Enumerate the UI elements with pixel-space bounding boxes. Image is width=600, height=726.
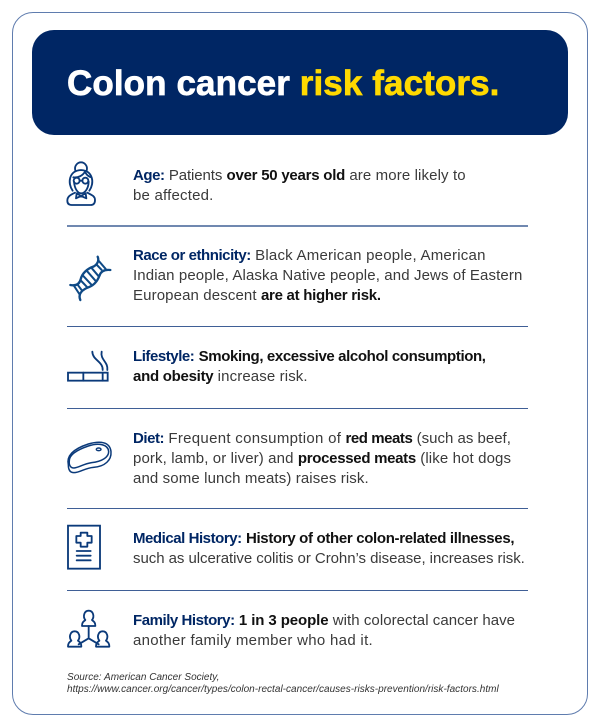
text: family history: another family member who had it. [133,632,373,649]
text: lifestyle: Lifestyle: Smoking, excessive alcohol consumption, [133,348,486,365]
title: Colon cancer risk factors. [67,64,499,103]
text: race or ethnicity [133,247,522,304]
icon: medical record [67,524,101,570]
text: medical history: Medical History: History of other colon-related illnesses, [133,530,514,547]
icon: cigarette [67,350,109,382]
text: family history [133,612,515,649]
text: race or ethnicity: Indian people, Alaska Native people, and Jews of Eastern [133,267,522,284]
text: age: be affected. [133,187,214,204]
source note: https://www.cancer.org/cancer/types/colon-rectal-cancer/causes-risks-prevention/risk-factors.html [67,684,499,695]
text: race or ethnicity: Race or ethnicity: Black American people, American [133,247,486,264]
text: family history: Family History: 1 in 3 people with colorectal cancer have [133,612,515,629]
text: diet: Diet: Frequent consumption of red meats (such as beef, [133,430,511,447]
text: age: Age: Patients over 50 years old are more likely to [133,167,466,184]
text: race or ethnicity: European descent are at higher risk. [133,287,381,304]
icon: grandmother with glasses [66,161,96,206]
source note [67,672,499,695]
text: lifestyle: and obesity increase risk. [133,368,308,385]
icon: family tree [67,610,110,648]
text: diet: pork, lamb, or liver) and processed meats (like hot dogs [133,450,511,467]
text: diet: and some lunch meats) raises risk. [133,470,369,487]
source note: Source: American Cancer Society, [67,672,219,683]
text: age [133,167,466,204]
text: lifestyle [133,348,486,385]
icon: DNA helix [69,256,112,302]
text: medical history [133,530,525,567]
text: diet [133,430,511,487]
text: medical history: such as ulcerative colitis or Crohn’s disease, increases risk. [133,550,525,567]
icon: steak [67,442,112,474]
title banner [32,30,568,135]
